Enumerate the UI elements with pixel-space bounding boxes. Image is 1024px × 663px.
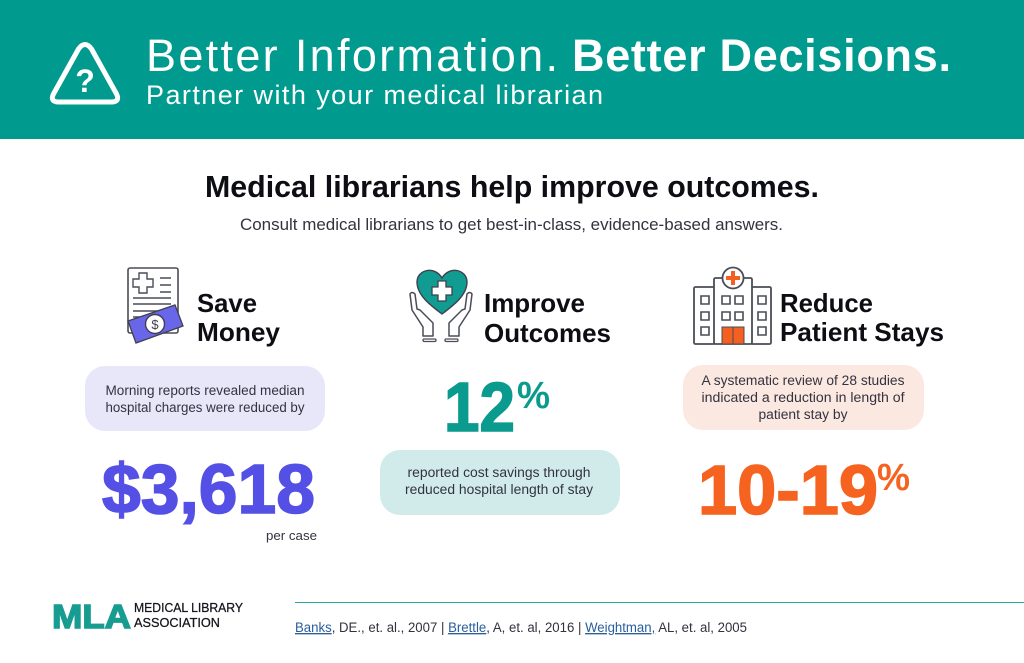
footer logo: MLA: MLA — [52, 598, 131, 635]
stat: 10-19%: 10-19 — [698, 451, 878, 529]
footer logo: MLA: MEDICAL LIBRARY — [134, 601, 244, 615]
heading: Medical librarians help improve outcomes. — [205, 169, 819, 204]
stat: 10-19%: % — [877, 457, 910, 499]
callout: systematic review: A systematic review of 28 studies — [702, 373, 905, 388]
heading: improve outcomes: Outcomes — [484, 318, 611, 348]
stat: 12%: 12 — [444, 368, 515, 446]
icon: warning triangle with question mark: ? — [75, 63, 95, 99]
heading: save money — [197, 288, 281, 347]
icon: hospital — [694, 268, 771, 344]
icon: bill and money: $ — [151, 317, 159, 332]
stat: $3,618: $3,618 — [102, 450, 315, 528]
citations: Banks, DE., et. al., 2007 | Brettle, A, et. al, 2016 | Weightman, AL, et. al, 2005 — [295, 620, 747, 635]
icon: bill and money — [128, 268, 183, 343]
callout: systematic review — [683, 365, 924, 430]
header band — [0, 0, 1024, 139]
subtitle: Partner with your medical librarian — [146, 80, 603, 110]
icon: warning triangle with question mark — [52, 44, 118, 102]
heading: reduce patient stays: Patient Stays — [780, 317, 944, 347]
title: Better Information. — [146, 30, 558, 81]
panel: save money — [85, 268, 325, 543]
heading: save money: Money — [197, 317, 281, 347]
title bold: Better Decisions. — [572, 30, 951, 81]
callout: systematic review: patient stay by — [758, 407, 848, 422]
callout: cost savings: reduced hospital length of stay — [405, 482, 593, 497]
footer logo: MLA: ASSOCIATION — [134, 616, 220, 630]
callout: systematic review: indicated a reduction in length of — [702, 390, 905, 405]
callout: cost savings — [380, 450, 620, 515]
panel: improve outcomes — [380, 270, 620, 515]
subheading: Consult medical librarians to get best-in-class, evidence-based answers. — [240, 215, 783, 234]
stat: 12%: % — [517, 375, 550, 417]
callout: morning reports — [85, 366, 325, 431]
heading: save money: Save — [197, 288, 257, 318]
heading: improve outcomes: Improve — [484, 288, 585, 318]
panel: reduce patient stays — [683, 268, 944, 529]
heading: reduce patient stays — [780, 288, 944, 347]
caption: per case: per case — [266, 528, 317, 543]
callout: morning reports: Morning reports revealed median — [106, 383, 304, 398]
icon: heart in hands — [410, 270, 472, 342]
footer logo: MLA — [52, 598, 244, 635]
heading: improve outcomes — [484, 288, 611, 348]
heading: reduce patient stays: Reduce — [780, 288, 873, 318]
callout: morning reports: hospital charges were reduced by — [106, 400, 305, 415]
callout: cost savings: reported cost savings through — [408, 465, 590, 480]
